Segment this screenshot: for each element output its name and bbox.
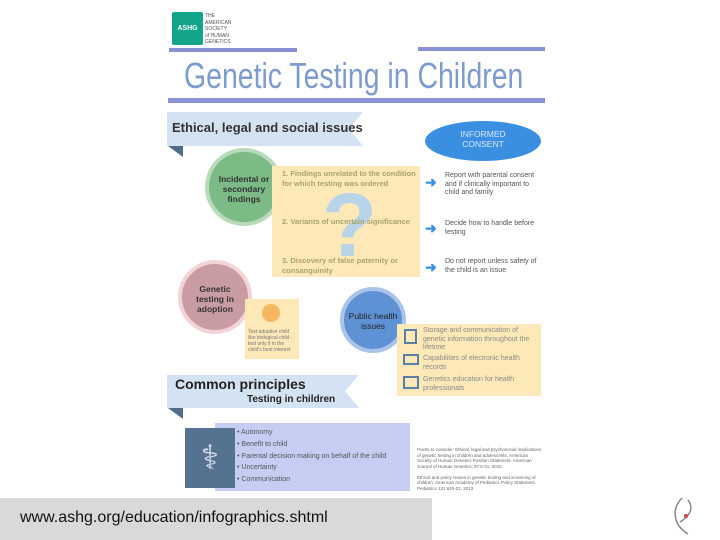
- references: Ethical and policy issues in genetic testing and screening of children. American Academy of Pediatrics Policy Statement. Pediatrics 131:620-22, 2013: [417, 474, 536, 490]
- icon: dna logo: [674, 498, 692, 534]
- circle: genetic testing in adoption: [178, 260, 252, 334]
- arrows and consent actions: ➜: [425, 259, 437, 275]
- icon: computer: [403, 354, 419, 365]
- footer url box: www.ashg.org/education/infographics.shtml: [20, 509, 328, 526]
- arrows and consent actions: Decide how to handle before testing: [445, 220, 534, 236]
- yellow panel: findings: 3. Discovery of false paternity or consanguinity: [282, 256, 398, 274]
- yellow panel: public health: Storage and communication of genetic information throughout the lifetime: [423, 327, 529, 351]
- logo mark: ASHG: [177, 25, 198, 32]
- informed consent ellipse: CONSENT: [462, 139, 504, 149]
- arrows and consent actions: ➜: [425, 174, 437, 190]
- logo text: [205, 13, 231, 45]
- arrows and consent actions: Do not report unless safety of the child is an issue: [445, 258, 536, 274]
- panel: principles list: • Benefit to child: [237, 441, 287, 448]
- circle: incidental findings: [205, 148, 283, 226]
- circle: genetic testing in adoption: adoption: [197, 304, 233, 314]
- panel: principles list: [215, 423, 410, 491]
- arrows and consent actions: ➜: [425, 220, 437, 236]
- yellow panel: public health: [397, 324, 541, 396]
- banner: ethical legal social: Ethical, legal and social issues: [172, 120, 363, 135]
- banner: common principles: [167, 375, 359, 419]
- circle: genetic testing in adoption: testing in: [196, 294, 234, 304]
- logo text: THE: [205, 13, 215, 19]
- icon: question mark: ?: [322, 176, 377, 276]
- yellow panel: public health: Capabilities of electronic health records: [423, 355, 520, 370]
- logo: [172, 12, 231, 45]
- circle: incidental findings: secondary: [223, 184, 265, 194]
- logo text: SOCIETY: [205, 26, 227, 32]
- banner: common principles: Testing in children: [247, 394, 335, 405]
- banner: ethical legal social: [167, 112, 363, 157]
- arrows and consent actions: [425, 172, 536, 275]
- icon: caduceus: [185, 428, 235, 488]
- panel: principles list: • Parental decision making on behalf of the child: [237, 453, 386, 460]
- logo text: of HUMAN: [205, 32, 229, 38]
- logo text: GENETICS: [205, 39, 231, 45]
- circle: incidental findings: Incidental or: [219, 174, 269, 184]
- circle: genetic testing in adoption: Genetic: [199, 284, 231, 294]
- footer url box: [0, 498, 432, 540]
- icon: baby: [262, 304, 280, 322]
- yellow panel: public health: Genetics education for health professionals: [423, 376, 514, 392]
- logo mark: [172, 12, 203, 45]
- circle: public health: issues: [361, 321, 385, 331]
- arrows and consent actions: Report with parental consent and if clinically important to child and family: [445, 172, 534, 196]
- circle: public health: Public health: [349, 311, 397, 321]
- panel: principles list: • Communication: [237, 476, 290, 483]
- icon: book: [403, 376, 419, 389]
- panel: principles list: • Uncertainty: [237, 464, 277, 471]
- references: [417, 447, 542, 491]
- circle: incidental findings: findings: [227, 194, 261, 204]
- references: Points to consider: Ethical, legal and psychosocial implications of genetic testing in children and adolescents. American Society of Human Genetics Position Statement. American Journal of Human Genetics; 97:6-21, 2015: [417, 447, 541, 468]
- yellow panel: adoption: Test adoptive child like biological child - test only if in the child's best interest: [248, 329, 292, 353]
- title: Genetic Testing in Children: [184, 55, 523, 96]
- yellow panel: findings: [272, 166, 420, 277]
- panel: principles list: • Autonomy: [237, 429, 273, 436]
- yellow panel: findings: 2. Variants of uncertain significance: [282, 217, 410, 226]
- icon: caduceus: ⚕: [201, 439, 219, 477]
- icon: document: [404, 329, 417, 344]
- banner: common principles: Common principles: [175, 376, 306, 392]
- yellow panel: adoption: [245, 299, 299, 359]
- logo text: AMERICAN: [205, 20, 231, 26]
- informed consent ellipse: INFORMED: [460, 129, 506, 139]
- yellow panel: findings: 1. Findings unrelated to the condition for which testing was ordered: [282, 169, 416, 188]
- circle: public health: [340, 287, 406, 353]
- informed consent ellipse: [425, 121, 541, 161]
